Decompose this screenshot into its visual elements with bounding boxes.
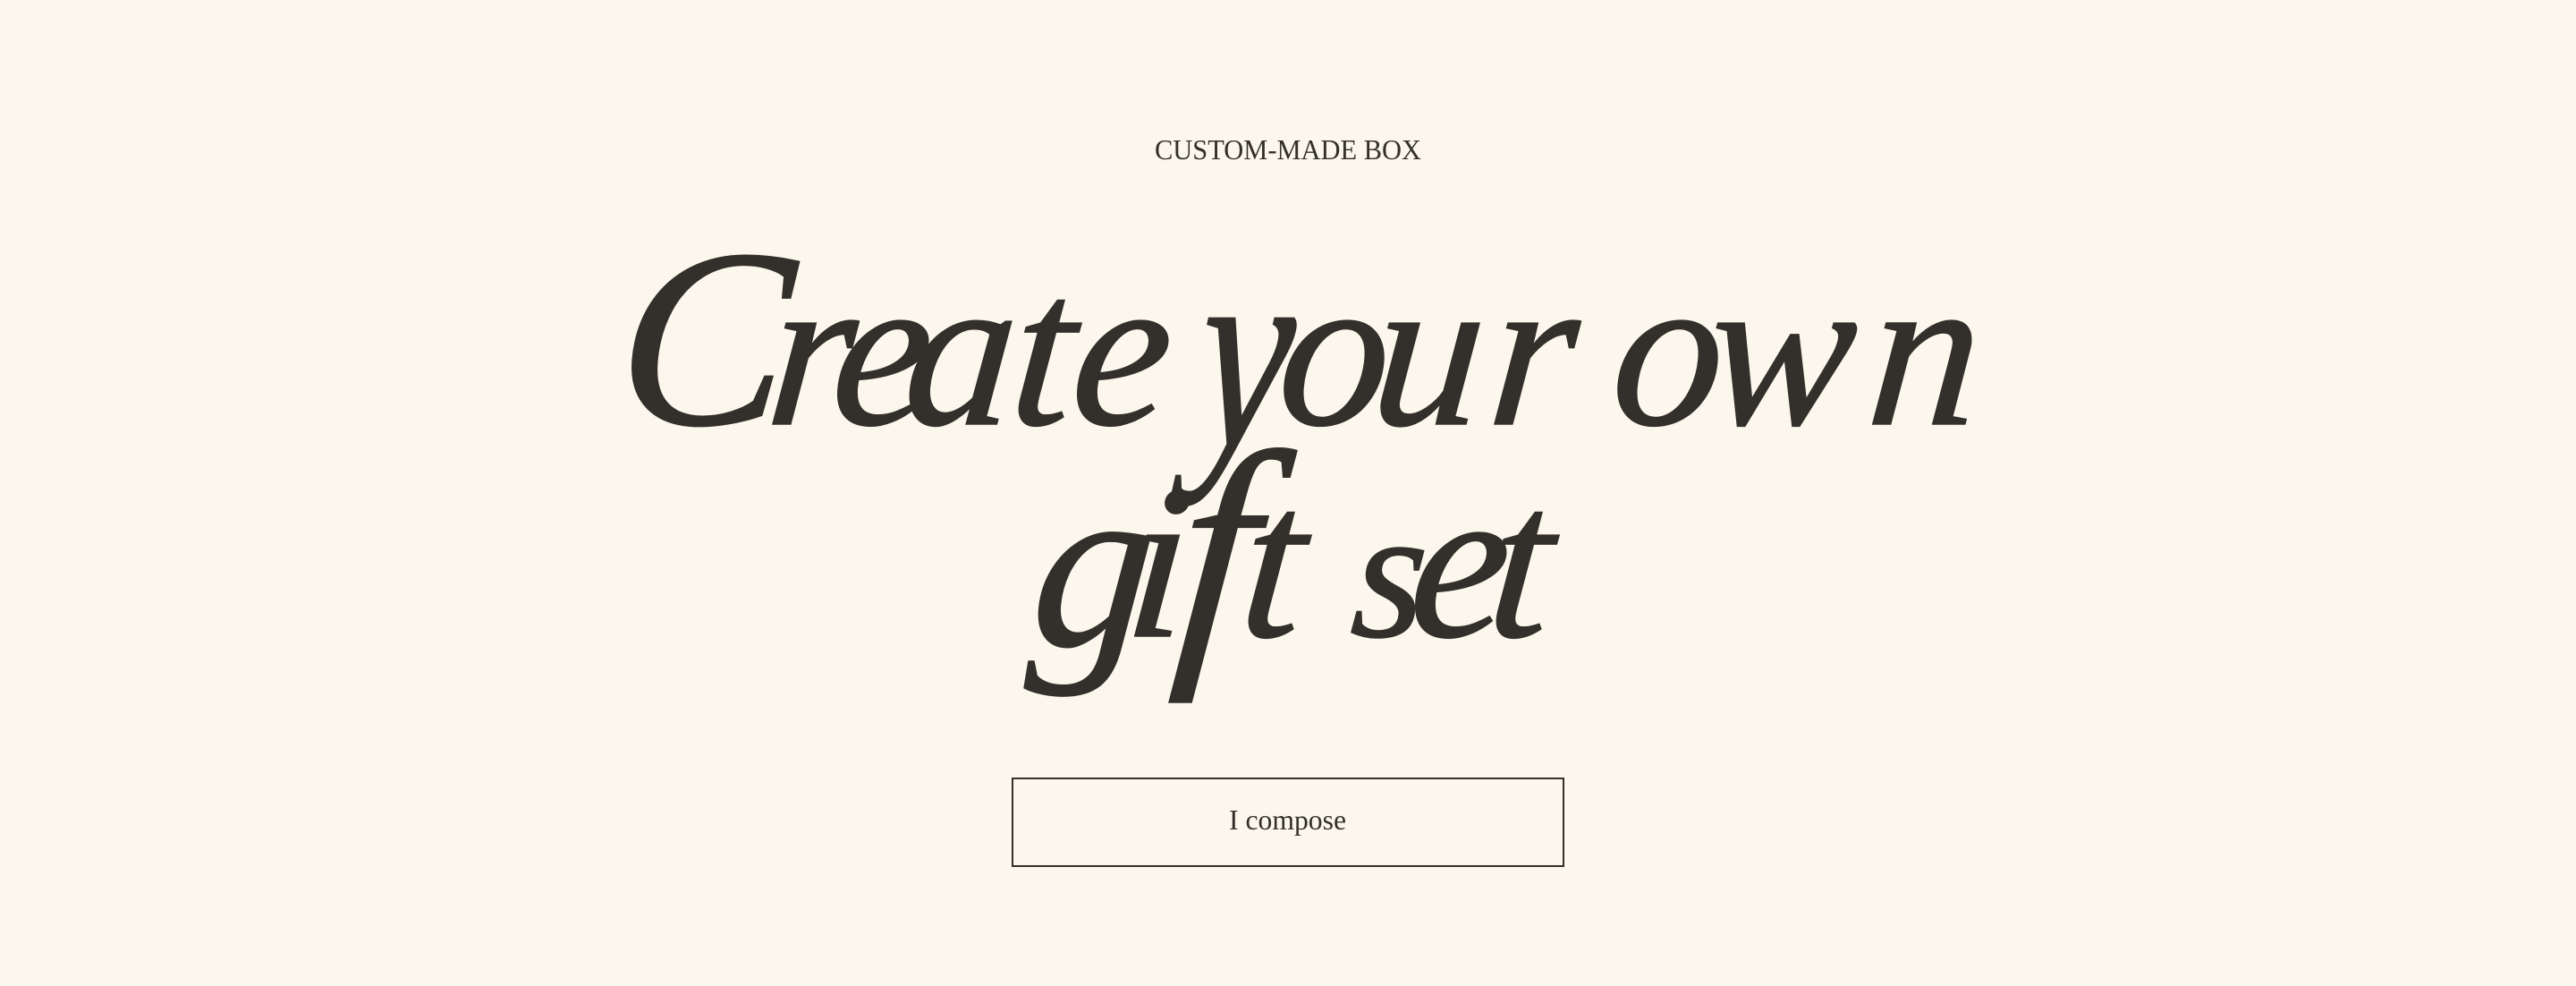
heading: own	[1604, 228, 1992, 472]
heading: et	[1402, 440, 1568, 684]
button: I compose: I compose	[1229, 803, 1346, 836]
heading: y	[1167, 198, 1309, 506]
heading	[608, 197, 1995, 704]
heading: i	[1118, 440, 1200, 684]
eyebrow label: CUSTOM-MADE BOX	[1155, 133, 1421, 166]
heading: C	[608, 197, 808, 480]
heading: f	[1165, 397, 1305, 704]
heading: reate	[759, 228, 1182, 472]
heading: t	[1233, 440, 1320, 684]
heading: our	[1270, 228, 1589, 472]
heading: g	[1023, 432, 1166, 698]
button: I compose	[1013, 778, 1563, 866]
heading: s	[1345, 469, 1436, 677]
